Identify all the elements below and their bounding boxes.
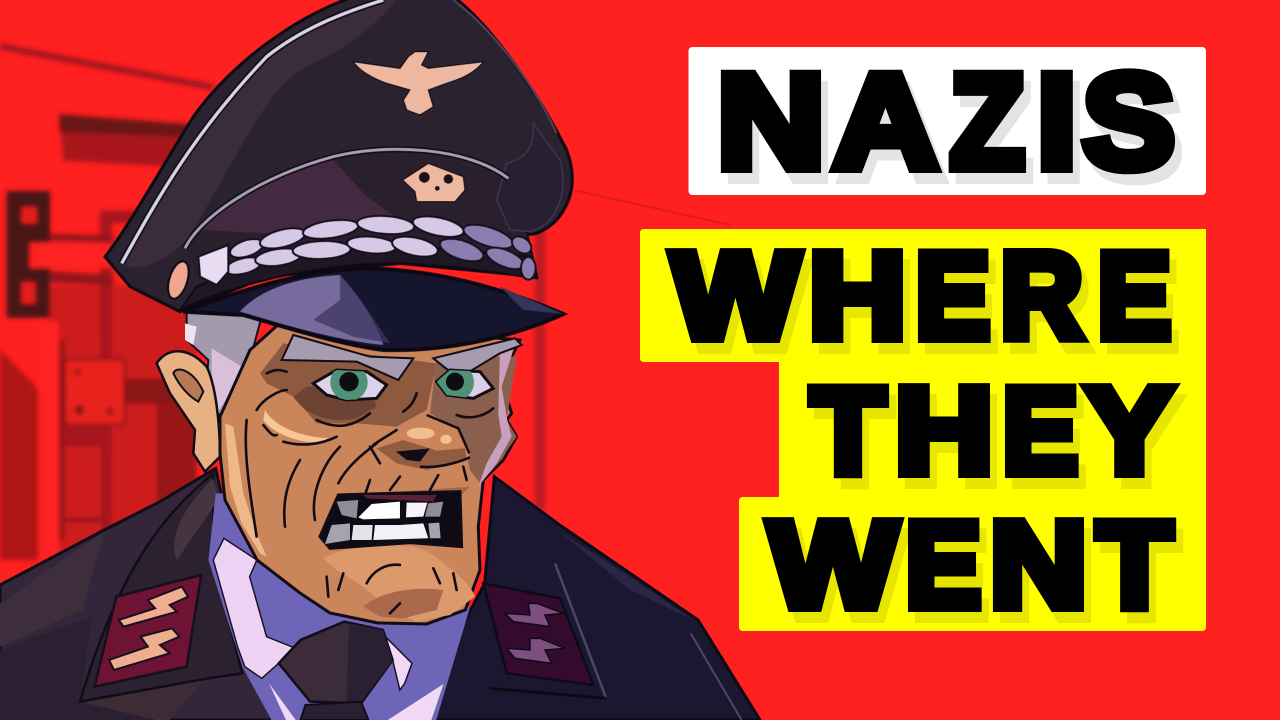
yellow label text shadows: W <box>679 238 807 374</box>
NAZIS shadow: Z <box>957 58 1032 208</box>
WHERE text: E <box>1098 228 1171 364</box>
THEY text: T <box>811 362 885 498</box>
yellow label text shadows: T <box>1104 508 1179 644</box>
hair <box>187 310 263 415</box>
yellow label text shadows: T <box>818 374 892 510</box>
face base <box>220 320 520 624</box>
yellow label text shadows: Y <box>1093 374 1180 510</box>
WENT text: E <box>906 496 981 632</box>
THEY text: E <box>1002 362 1078 498</box>
WHERE text: E <box>916 228 990 364</box>
yellow label text shadows: E <box>1010 374 1085 510</box>
WHERE text: H <box>809 228 906 364</box>
cap crown <box>105 0 572 312</box>
headline: WHERE THEY WENT <box>640 228 1206 644</box>
NAZIS text: I <box>1037 48 1076 196</box>
white label box <box>688 47 1206 195</box>
NAZIS text: S <box>1082 48 1175 196</box>
cap side shading <box>497 123 563 232</box>
NAZIS text: N <box>717 48 825 196</box>
yellow label text shadows: E <box>1105 238 1178 374</box>
yellow label text shadows: H <box>902 374 1000 510</box>
cap visor <box>183 268 563 350</box>
yellow label text shadows <box>679 238 1180 644</box>
shirt <box>208 493 469 720</box>
THEY text: H <box>895 362 993 498</box>
lower face shading <box>323 545 475 622</box>
NAZIS shadow: S <box>1090 58 1182 208</box>
yellow label text shadows: W <box>776 508 905 644</box>
peaked cap <box>105 0 572 350</box>
blurred background door <box>0 46 545 560</box>
NAZIS text: Z <box>950 48 1025 196</box>
head <box>157 310 522 624</box>
nose <box>372 417 470 471</box>
NAZIS shadow: N <box>724 58 832 208</box>
NAZIS shadow: A <box>840 58 945 208</box>
cap skull emblem <box>403 163 465 202</box>
NAZIS shadow: I <box>1044 58 1084 208</box>
headline: NAZIS <box>688 47 1206 208</box>
cap button <box>164 259 193 301</box>
left collar patch <box>95 575 201 687</box>
right eye <box>437 364 493 401</box>
yellow label text shadows: R <box>1008 238 1090 374</box>
WENT text: W <box>769 496 898 632</box>
faint wire line <box>573 190 730 225</box>
wrinkles <box>246 370 493 613</box>
yellow label text shadows: H <box>816 238 913 374</box>
yellow label text shadows: E <box>922 238 997 374</box>
mouth and teeth <box>320 492 462 548</box>
cap cord <box>198 212 536 285</box>
uniform coat and shirt <box>0 468 760 720</box>
eyebrows <box>282 335 413 380</box>
cap piping <box>122 0 383 263</box>
cap eagle emblem <box>353 52 483 115</box>
THEY text: Y <box>1086 362 1173 498</box>
cap band <box>180 245 537 310</box>
character: officer illustration <box>0 0 760 720</box>
WHERE text: W <box>672 228 800 364</box>
yellow label text shadows: E <box>912 508 988 644</box>
left eye <box>313 364 387 401</box>
right collar patch <box>483 583 593 685</box>
WENT text: N <box>990 496 1087 632</box>
NAZIS text: A <box>833 48 938 196</box>
WHERE text: R <box>1000 228 1083 364</box>
NAZIS shadow <box>724 58 1182 208</box>
yellow label box <box>640 229 1206 631</box>
yellow label text shadows: N <box>997 508 1094 644</box>
ear <box>157 351 220 472</box>
tie <box>279 622 393 703</box>
WENT text: T <box>1097 496 1172 632</box>
face highlights and shadows <box>225 423 267 557</box>
